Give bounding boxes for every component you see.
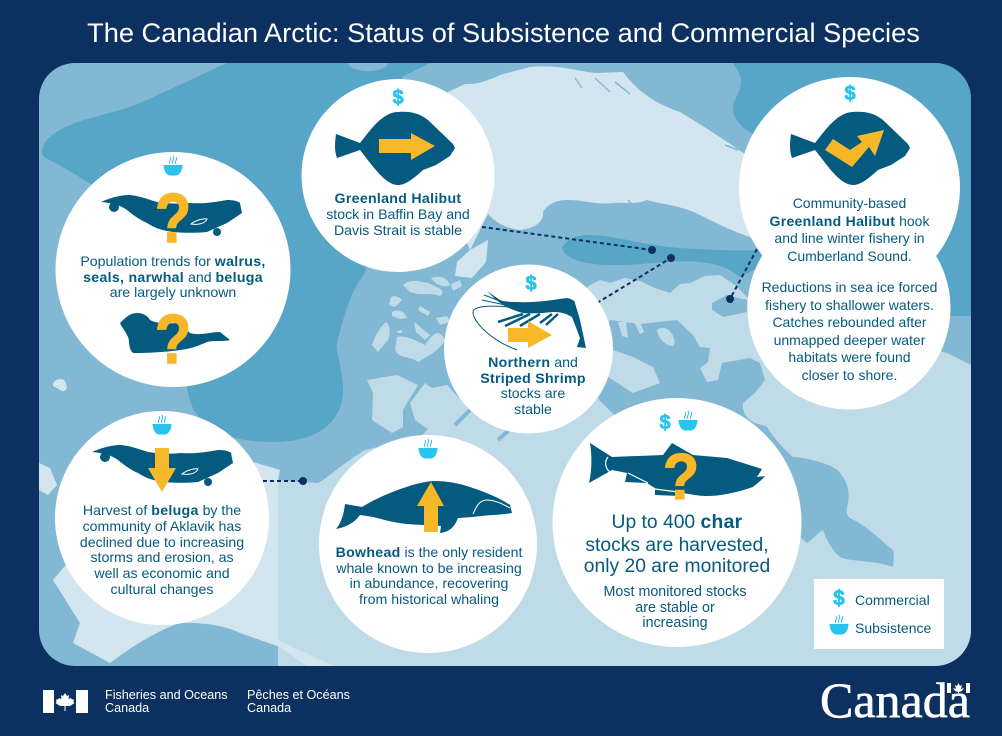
icon: beluga silhouette	[92, 445, 233, 486]
icon: question mark over char: ?	[663, 442, 699, 514]
text: char headline: stocks are harvested,	[585, 535, 769, 556]
text: monitored stocks: are stable or	[635, 600, 715, 616]
text: shrimp: stocks are	[501, 385, 565, 401]
footer: Government of Canada flag symbol	[43, 690, 88, 713]
icon: dollar: $	[392, 87, 404, 109]
icon: dollar: $	[525, 273, 537, 295]
legend label: commercial: Commercial	[855, 592, 930, 608]
text: monitored stocks: Most monitored stocks	[603, 584, 747, 600]
text: bowhead	[335, 544, 522, 607]
text: population trends: Population trends for walrus,	[80, 253, 266, 269]
icon: bowhead whale silhouette	[336, 481, 512, 533]
dashed connector: Cumberland Sound	[726, 249, 757, 303]
text: char headline: Up to 400 char	[612, 512, 743, 533]
icon: subsistence bowl	[152, 415, 172, 434]
text: population trends	[80, 253, 266, 300]
text: shrimp: Northern and	[488, 354, 578, 370]
footer: department name English: Canada	[105, 701, 149, 715]
text: community fishery	[770, 195, 930, 264]
text: monitored stocks	[603, 584, 747, 631]
icon: shrimp silhouette	[473, 291, 586, 350]
text: bowhead: whale known to be increasing	[335, 560, 522, 576]
icon: dollar: $	[659, 412, 671, 434]
map panel	[39, 55, 971, 666]
panel: walrus, seals, narwhal and beluga	[56, 152, 290, 387]
text: bowhead: in abundance, recovering	[350, 575, 508, 591]
icon: rebound arrow	[825, 130, 884, 167]
panel: beluga harvest	[55, 411, 269, 625]
legend	[814, 579, 944, 649]
icon: question mark over beluga: ?	[155, 178, 191, 257]
text: population trends: seals, narwhal and beluga	[83, 269, 263, 285]
footer: department name French: Canada	[247, 701, 291, 715]
footer: department name English	[105, 688, 228, 715]
icon: char silhouette	[589, 443, 765, 496]
icon: halibut silhouette	[335, 112, 455, 185]
panel: Greenland Halibut stable	[302, 79, 494, 272]
icon: dollar: $	[833, 587, 845, 610]
text: sea ice reductions: closer to shore.	[802, 367, 897, 383]
footer: department name French	[247, 688, 350, 715]
text: char headline	[584, 512, 770, 577]
text: beluga harvest: Harvest of beluga by the	[83, 502, 241, 518]
text: sea ice reductions: Reductions in sea ice forced	[762, 279, 937, 295]
panel: Cumberland Sound fishery	[739, 77, 960, 410]
text: shrimp: stable	[514, 401, 552, 417]
text: sea ice reductions	[762, 279, 937, 383]
text: community fishery: Cumberland Sound.	[787, 248, 912, 264]
icon: right arrow	[379, 133, 435, 160]
text: sea ice reductions: habitats were found	[788, 349, 911, 365]
text: beluga harvest: well as economic and	[93, 565, 230, 581]
icon: up arrow	[417, 482, 444, 532]
text: shrimp: Striped Shrimp	[480, 370, 586, 386]
text: bowhead: from historical whaling	[359, 591, 499, 607]
text: beluga harvest: storms and erosion, as	[90, 549, 234, 565]
text: char headline: only 20 are monitored	[584, 556, 770, 577]
panel: shrimp	[444, 264, 613, 434]
footer: department name French: Pêches et Océans	[247, 688, 350, 702]
text: shrimp	[480, 354, 586, 417]
text: community fishery: Greenland Halibut hook	[770, 213, 930, 229]
text: sea ice reductions: unmapped deeper water	[774, 332, 926, 348]
icon: seal silhouette	[120, 313, 230, 353]
icon: right arrow	[508, 321, 552, 348]
icon: subsistence bowl	[830, 615, 848, 634]
icon: halibut silhouette	[790, 112, 910, 185]
text: sea ice reductions: fishery to shallower waters.	[765, 297, 934, 313]
icon: beluga silhouette	[101, 195, 242, 236]
text: halibut stock: stock in Baffin Bay and	[326, 206, 470, 222]
text: community fishery: and line winter fishery in	[774, 230, 925, 246]
text: sea ice reductions: Catches rebounded after	[772, 314, 927, 330]
panel: char	[552, 398, 802, 647]
title: The Canadian Arctic: Status of Subsistence and Commercial Species	[87, 17, 920, 48]
text: halibut stock: Greenland Halibut	[335, 190, 461, 206]
icon: question mark over seal: ?	[155, 299, 191, 378]
text: beluga harvest	[80, 502, 244, 597]
dashed connector: Aklavik	[263, 477, 307, 485]
legend label: subsistence: Subsistence	[855, 620, 931, 636]
dashed connector: shrimp	[597, 254, 675, 303]
text: halibut stock: Davis Strait is stable	[334, 222, 462, 238]
text: beluga harvest: cultural changes	[111, 581, 213, 597]
dashed connector: halibut to Baffin Bay	[475, 226, 656, 254]
icon: subsistence bowl	[418, 439, 438, 458]
text: monitored stocks: increasing	[642, 615, 708, 631]
icon: dollar: $	[844, 83, 856, 105]
text: halibut stock	[326, 190, 470, 238]
text: beluga harvest: community of Aklavik has	[83, 518, 241, 534]
icon: subsistence bowl	[164, 156, 182, 176]
footer: department name English: Fisheries and Oceans	[105, 688, 228, 702]
footer: Canada wordmark: Canada	[820, 672, 970, 728]
icon: down arrow	[148, 448, 176, 492]
panel: bowhead	[319, 435, 537, 653]
text: bowhead: Bowhead is the only resident	[336, 544, 522, 560]
text: community fishery: Community-based	[793, 195, 906, 211]
text: beluga harvest: declined due to increasing	[80, 534, 244, 550]
icon: subsistence bowl	[678, 411, 698, 430]
text: population trends: are largely unknown	[110, 284, 236, 300]
